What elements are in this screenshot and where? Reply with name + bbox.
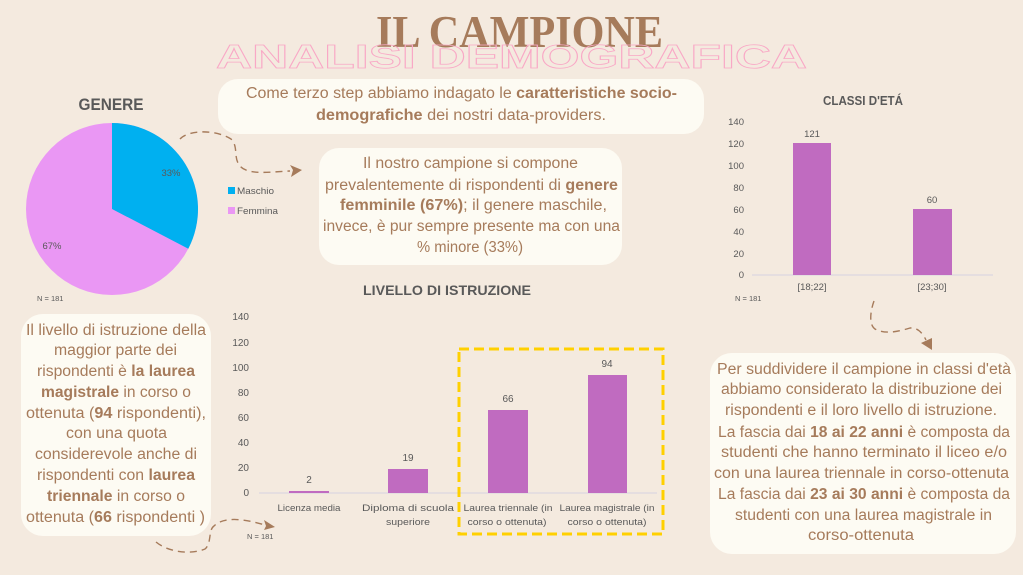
panel: age chart: 120 bbox=[728, 139, 744, 150]
panel: age text: corso-ottenuta bbox=[808, 527, 914, 544]
panel: gender text bbox=[319, 148, 622, 265]
panel: education chart: Laurea magistrale (in bbox=[560, 503, 654, 514]
panel: education chart: 60 bbox=[238, 413, 249, 424]
panel: education chart: 120 bbox=[232, 338, 249, 349]
panel: age text: con una laurea triennale in corso-ottenuta bbox=[714, 465, 1009, 482]
panel: education text: rispondenti è la laurea bbox=[37, 363, 195, 380]
arrow: age chart to text bbox=[871, 301, 932, 350]
panel: age text: studenti con una laurea magistrale in bbox=[735, 507, 992, 524]
panel: education text: triennale in corso o bbox=[47, 488, 185, 505]
panel: age chart: 80 bbox=[733, 183, 744, 194]
panel: gender chart: Femmina bbox=[237, 206, 279, 217]
panel: education chart: N = 181 bbox=[247, 532, 273, 541]
arrow: education text to chart bbox=[156, 519, 275, 552]
panel: education chart: Licenza media bbox=[278, 503, 341, 514]
panel: age chart: [18;22] bbox=[797, 282, 827, 293]
panel: education text bbox=[21, 314, 211, 536]
panel: age text: studenti che hanno terminato il liceo e/o bbox=[721, 444, 1007, 461]
panel: education chart: LIVELLO DI ISTRUZIONE bbox=[363, 282, 531, 298]
panel: gender text: invece, è pur sempre presente ma con una bbox=[323, 218, 620, 235]
panel: age text: La fascia dai 23 ai 30 anni è composta da bbox=[718, 486, 1010, 503]
title: IL CAMPIONE bbox=[376, 7, 663, 57]
panel: education chart: 40 bbox=[238, 438, 249, 449]
panel: age text: abbiamo considerato la distribuzione dei bbox=[721, 381, 1002, 398]
panel: gender chart: 67% bbox=[42, 241, 62, 252]
panel: education chart: 19 bbox=[402, 453, 414, 464]
panel: age text: La fascia dai 18 ai 22 anni è composta da bbox=[718, 424, 1010, 441]
panel: education text: considerevole anche di bbox=[35, 446, 197, 463]
panel: age text: rispondenti e il loro livello di istruzione. bbox=[725, 402, 997, 419]
panel: introduction: Come terzo step abbiamo indagato le caratteristiche socio- bbox=[246, 85, 677, 102]
panel: gender chart: 33% bbox=[162, 168, 181, 179]
panel: gender chart: N = 181 bbox=[37, 294, 63, 303]
panel: gender chart: Maschio bbox=[237, 186, 274, 197]
panel: education chart: 100 bbox=[232, 363, 249, 374]
panel: age chart: N = 181 bbox=[735, 294, 761, 303]
panel: age chart: 40 bbox=[733, 227, 744, 238]
panel: education chart: Diploma di scuola bbox=[362, 503, 455, 514]
panel: education chart: 140 bbox=[232, 312, 249, 323]
panel: age chart: 60 bbox=[733, 205, 744, 216]
panel: education text: con una quota bbox=[66, 425, 167, 442]
panel: age chart: 20 bbox=[733, 249, 744, 260]
panel: age chart: 60 bbox=[927, 195, 937, 206]
panel: age text: Per suddividere il campione in classi d'età bbox=[717, 361, 1011, 378]
panel: education chart: 94 bbox=[601, 359, 613, 370]
panel: education chart: 2 bbox=[306, 475, 312, 486]
panel: education chart: superiore bbox=[386, 517, 430, 528]
panel: age chart bbox=[728, 93, 993, 303]
panel: education chart: corso o ottenuta) bbox=[468, 517, 546, 528]
panel: education text: maggior parte dei bbox=[54, 342, 177, 359]
panel: education text: magistrale in corso o bbox=[41, 384, 191, 401]
panel: education chart: 20 bbox=[238, 463, 249, 474]
panel: age chart: 121 bbox=[804, 129, 820, 140]
panel: age chart: CLASSI D'ETÁ bbox=[823, 93, 904, 108]
panel: education chart: 0 bbox=[243, 488, 249, 499]
panel: introduction bbox=[218, 79, 704, 134]
panel: education chart: Laurea triennale (in bbox=[464, 503, 552, 514]
arrow: gender chart to text bbox=[180, 132, 302, 177]
panel: education chart: 66 bbox=[502, 394, 514, 405]
panel: gender text: % minore (33%) bbox=[417, 239, 523, 256]
panel: gender text: femminile (67%) ; il genere maschile, bbox=[340, 197, 607, 214]
panel: education text: ottenuta (94 rispondenti), bbox=[26, 405, 206, 422]
panel: gender text: Il nostro campione si compone bbox=[363, 155, 578, 172]
panel: gender chart bbox=[26, 96, 279, 303]
panel: introduction: demografiche dei nostri data-providers. bbox=[316, 107, 606, 124]
panel: education text: Il livello di istruzione della bbox=[26, 322, 206, 339]
panel: age chart: 0 bbox=[739, 270, 744, 281]
panel: education chart bbox=[232, 282, 657, 541]
subtitle: ANALISI DEMOGRAFICA bbox=[216, 39, 807, 76]
panel: age text bbox=[710, 353, 1016, 554]
panel: age chart: 100 bbox=[728, 161, 744, 172]
panel: age chart: [23;30] bbox=[917, 282, 947, 293]
panel: gender chart: GENERE bbox=[78, 96, 144, 114]
panel: education chart: 80 bbox=[238, 388, 249, 399]
panel: age chart: 140 bbox=[728, 117, 744, 128]
panel: gender text: prevalentemente di rispondenti di genere bbox=[325, 177, 618, 194]
panel: education text: ottenuta (66 rispondenti ) bbox=[26, 509, 205, 526]
panel: education text: rispondenti con laurea bbox=[37, 467, 195, 484]
panel: education chart: corso o ottenuta) bbox=[568, 517, 646, 528]
callout: highlighted degrees bbox=[459, 349, 663, 534]
